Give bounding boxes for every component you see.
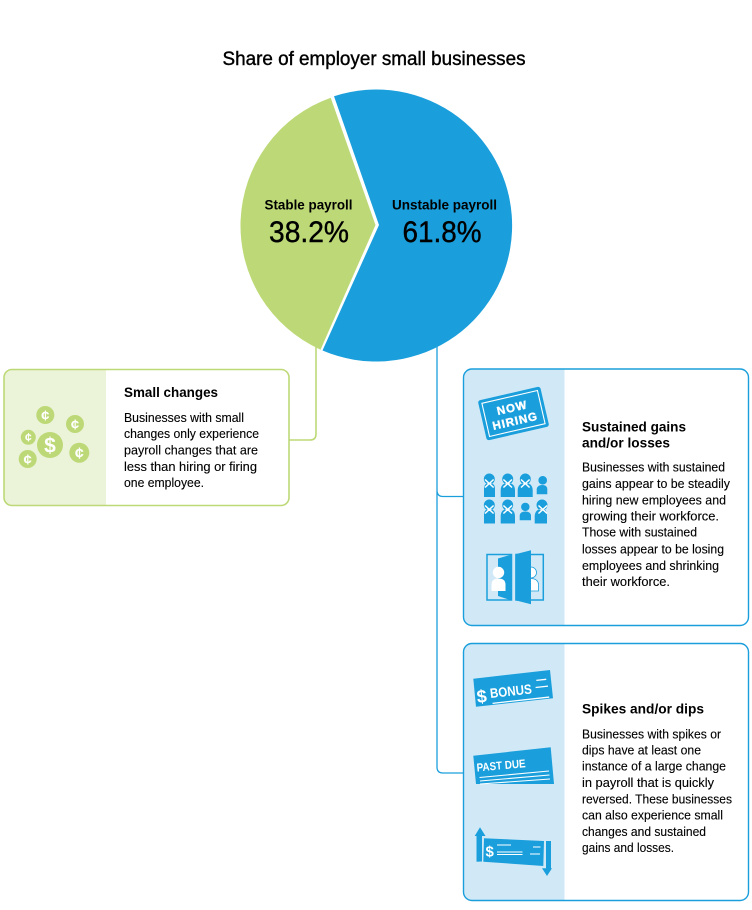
icon: past due bill: PAST DUE — [476, 758, 526, 774]
pie chart — [240, 90, 512, 362]
label: unstable payroll — [392, 196, 497, 249]
text: sustained gains description: their workforce. — [582, 574, 670, 589]
text: sustained gains description — [582, 460, 730, 589]
heading: small changes: Small changes — [124, 384, 218, 400]
icon: coins: ¢ — [24, 452, 32, 468]
icon: check with up and down arrows: $ — [486, 844, 494, 860]
text: spikes and dips description: dips have at least one — [582, 743, 701, 758]
text: sustained gains description: hiring new employees and — [582, 492, 726, 507]
text: small changes description: one employee. — [124, 475, 204, 490]
label: stable payroll: Stable payroll — [264, 196, 352, 212]
label: stable payroll — [264, 196, 352, 249]
text: small changes description: Businesses with small — [124, 410, 244, 425]
text: sustained gains description: employees and shrinking — [582, 558, 719, 573]
text: sustained gains description: losses appear to be losing — [582, 541, 724, 556]
text: spikes and dips description: can also experience small — [582, 808, 723, 823]
icon: coins — [19, 406, 89, 468]
panel: spikes and/or dips — [464, 644, 748, 900]
label: stable payroll: 38.2% — [269, 216, 349, 249]
panel: small changes — [4, 370, 289, 506]
label: unstable payroll: Unstable payroll — [392, 196, 497, 212]
icon: door with departing people — [487, 550, 543, 604]
pie slice: stable payroll — [240, 98, 376, 350]
icon: coins: ¢ — [41, 408, 49, 424]
title: Share of employer small businesses — [222, 48, 526, 70]
text: spikes and dips description: reversed. These businesses — [582, 791, 732, 806]
heading: spikes and/or dips: Spikes and/or dips — [582, 700, 704, 716]
heading: sustained gains and/or losses: Sustained gains — [582, 418, 686, 434]
heading: sustained gains and/or losses — [582, 418, 686, 450]
icon: bonus check: $ — [476, 686, 488, 707]
text: small changes description: changes only experience — [124, 426, 259, 441]
icon: coins: $ — [44, 434, 56, 458]
connector: stable payroll to small changes — [289, 345, 316, 440]
text: sustained gains description: gains appear to be steadily — [582, 476, 730, 491]
text: spikes and dips description: changes and sustained — [582, 824, 706, 839]
icon: coins: ¢ — [25, 431, 32, 445]
icon: workforce people — [484, 474, 548, 524]
icon: now hiring sign: HIRING — [492, 411, 539, 433]
panel: sustained gains and/or losses — [464, 369, 748, 626]
icon: check with up and down arrows — [475, 827, 552, 876]
icon: bonus check: BONUS — [489, 681, 533, 701]
icon: now hiring sign: NOW — [496, 399, 529, 418]
text: sustained gains description: Those with sustained — [582, 525, 697, 540]
text: small changes description: less than hiring or firing — [124, 459, 257, 474]
text: spikes and dips description: in payroll that is quickly — [582, 775, 714, 790]
text: spikes and dips description: instance of a large change — [582, 759, 726, 774]
text: sustained gains description: growing their workforce. — [582, 509, 719, 524]
icon: coins: ¢ — [71, 416, 79, 434]
text: spikes and dips description: gains and losses. — [582, 840, 674, 855]
icon: bonus check — [473, 670, 553, 707]
icon: coins: ¢ — [75, 446, 84, 462]
heading: sustained gains and/or losses: and/or losses — [582, 434, 670, 450]
text: spikes and dips description — [582, 726, 732, 855]
text: spikes and dips description: Businesses with spikes or — [582, 726, 722, 741]
text: small changes description — [124, 410, 259, 490]
icon: now hiring sign — [478, 386, 549, 441]
connector: unstable payroll to right panels — [437, 345, 464, 773]
text: sustained gains description: Businesses with sustained — [582, 460, 725, 475]
icon: past due bill — [473, 747, 554, 784]
pie slice: unstable payroll — [322, 90, 512, 362]
label: unstable payroll: 61.8% — [402, 216, 482, 249]
text: small changes description: payroll changes that are — [124, 442, 258, 458]
